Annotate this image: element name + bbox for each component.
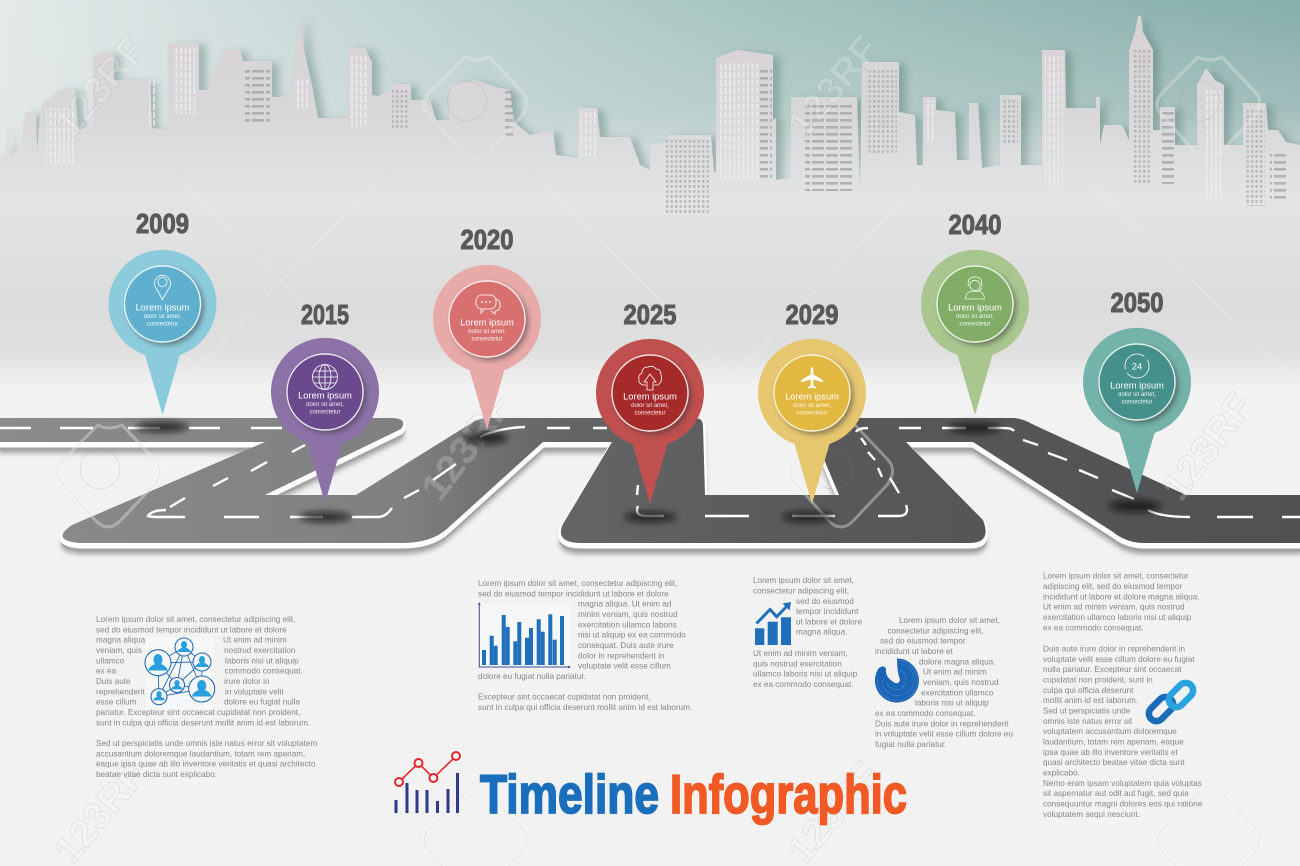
text block 5: voluptate velit esse cillum dolore eu fugiat	[1043, 655, 1195, 664]
text block 5: Nemo enim ipsam voluptatem quia voluptas	[1043, 779, 1202, 788]
pin 2050: consectetur	[1121, 400, 1153, 406]
text block 3: quis nostrud exercitation	[753, 659, 842, 668]
text block 1: accusantium doloremque laudantium, totam rem aperiam,	[96, 749, 305, 758]
text block 2: magna aliqua. Ut enim ad	[578, 600, 672, 609]
text block 2: sunt in culpa qui officia deserunt mollit anim id est laborum.	[478, 703, 692, 712]
road centre dashes	[0, 427, 1300, 517]
text block 2: voluptate velit esse cillum	[578, 662, 671, 671]
text block 3: tempor incididunt	[796, 607, 859, 616]
icon: chain link	[1146, 680, 1196, 724]
text block 2: sed do eiusmod tempor incididunt ut labore et dolore	[478, 589, 669, 598]
text block 1: eaque ipsa quae ab illo inventore veritatis et quasi architecto	[96, 760, 316, 769]
icon: concentric pie	[875, 658, 919, 702]
text block 1: Duis aute	[96, 677, 131, 686]
pin 2009: Lorem ipsum	[136, 302, 190, 312]
pin 2029: 2029	[786, 299, 838, 330]
text block 4: Lorem ipsum dolor sit amet,	[899, 616, 1000, 625]
pin 2020: 2020	[460, 224, 514, 255]
pin 2015: 2015	[301, 299, 349, 330]
pin 2040	[921, 209, 1029, 415]
text block 2: dolor in reprehenderit in	[578, 651, 665, 660]
pin 2025: Lorem ipsum	[623, 392, 677, 402]
text block 5: consequuntur magni dolores eos qui ratione	[1043, 800, 1203, 808]
text block 2: Excepteur sint occaecat cupidatat non proident,	[478, 693, 651, 702]
pin 2040: Lorem ipsum	[948, 302, 1002, 312]
pin 2009	[108, 208, 216, 415]
icon: speech bubbles	[476, 295, 500, 314]
text block 4: ex ea commodo consequat.	[875, 709, 976, 718]
text block 1: sed do eiusmod tempor incididunt ut labore et dolore	[96, 625, 287, 634]
text block 1: Lorem ipsum dolor sit amet, consectetur adipiscing elit,	[96, 615, 295, 624]
text block 5: voluptatem accusantium doloremque	[1043, 727, 1177, 736]
text block 4: consectetur adipiscing elit,	[888, 626, 984, 635]
text block 1: irure dolor in	[224, 677, 270, 686]
pin 2020: Lorem ipsum	[460, 318, 514, 328]
pin 2029: dolor sit amet,	[793, 403, 831, 409]
text block 1: veniam, quis	[96, 646, 142, 655]
pin 2015: dolor sit amet,	[306, 402, 344, 408]
text block 3: Lorem ipsum dolor sit amet,	[753, 576, 854, 585]
icon: 24 hours	[1125, 354, 1149, 378]
text block 3: ex ea commodo consequat.	[753, 680, 854, 689]
pin 2025	[596, 299, 704, 504]
text block 3: magna aliqua.	[796, 628, 847, 637]
title: Timeline	[480, 763, 659, 825]
text block 3: sed do eiusmod	[796, 597, 854, 606]
watermarks: 123RF	[780, 28, 888, 146]
text block 2	[478, 579, 692, 712]
icon: people network	[145, 637, 215, 709]
text block 5: laudantium, totam rem aperiam, eaque	[1043, 738, 1184, 746]
watermarks: 123RF	[1155, 386, 1262, 508]
text block 1: laboris nisi ut aliquip	[225, 656, 299, 665]
text block 1: in voluptate velit	[225, 687, 284, 696]
text block 5: omnis iste natus error sit	[1043, 717, 1133, 726]
icon: cloud upload	[639, 366, 662, 390]
pin 2040: 2040	[948, 209, 1002, 240]
pin 2050: dolor sit amet,	[1118, 392, 1156, 398]
text block 4: fugiat nulla pariatur.	[875, 740, 946, 749]
text block 5: ipsa quae ab illo inventore veritatis et	[1043, 748, 1178, 757]
pin 2050: 2050	[1110, 287, 1164, 318]
pin 2025: consectetur	[634, 410, 666, 416]
pin 2015: Lorem ipsum	[298, 390, 352, 400]
text block 4: exercitation ullamco	[921, 688, 994, 697]
text block 3	[753, 576, 862, 689]
text block 4: laboris nisi ut aliquip	[915, 699, 989, 708]
text block 1: pariatur. Excepteur sint occaecat cupidatat non proident,	[96, 708, 300, 717]
text block 5: culpa qui officia deserunt	[1043, 686, 1134, 695]
text block 1: beatae vitae dicta sunt explicabo.	[96, 770, 217, 779]
text block 3: Ut enim ad minim veniam,	[753, 649, 848, 658]
text block 5: cupidatat non proident, sunt in	[1043, 676, 1153, 684]
text block 5: ex ea commodo consequat.	[1043, 623, 1144, 632]
pin 2015	[271, 299, 379, 503]
pin 2009: dolor sit amet,	[144, 314, 182, 320]
text block 5: adipiscing elit, sed do eiusmod tempor	[1043, 582, 1183, 591]
pin 2029	[758, 299, 866, 504]
pin 2025: 2025	[624, 299, 676, 330]
text block 1: ullamco	[96, 656, 125, 665]
pin 2050: Lorem ipsum	[1110, 380, 1164, 390]
text block 5: nulla pariatur. Excepteur sint occaecat	[1043, 665, 1182, 674]
pin 2029: consectetur	[796, 410, 828, 416]
text block 4: Duis aute irure dolor in reprehenderit	[875, 719, 1009, 728]
pin 2020: consectetur	[471, 336, 503, 342]
text block 1: dolore eu fugiat nulla	[224, 698, 300, 707]
text block 1: nostrud exercitation	[224, 646, 296, 655]
icon: headset operator	[966, 277, 984, 299]
text block 4: Ut enim ad minim	[923, 668, 987, 677]
text block 5: voluptatem sequi nesciunt.	[1043, 810, 1140, 819]
text block 5: Duis aute irure dolor in reprehenderit in	[1043, 644, 1185, 654]
pin 2009: consectetur	[147, 322, 178, 328]
text block 5: Lorem ipsum dolor sit amet, consectetur	[1043, 572, 1189, 581]
text block 5: exercitation ullamco laboris nisi ut aliquip	[1043, 613, 1192, 622]
text block 5	[1043, 572, 1203, 819]
text block 5: explicabo.	[1043, 768, 1080, 778]
text block 3: ut labore et dolore	[796, 618, 862, 626]
text block 4: dolore magna aliqua.	[919, 657, 995, 666]
text block 1: esse cillum	[96, 698, 137, 707]
text block 4: in voluptate velit esse cillum dolore eu	[875, 730, 1013, 739]
text block 2: dolore eu fugiat nulla pariatur.	[478, 672, 586, 681]
text block 1: magna aliqua.	[96, 636, 147, 645]
text block 3: consectetur adipiscing elit,	[753, 586, 849, 596]
icon: airplane	[801, 367, 823, 389]
watermarks: 123RF	[414, 386, 521, 508]
title	[480, 763, 907, 825]
text block 3: ullamco laboris nisi ut aliquip	[753, 670, 858, 679]
text block 5: Sed ut perspiciatis unde	[1043, 706, 1131, 716]
text block 2: exercitation ullamco laboris	[578, 620, 677, 629]
text block 2: nisi ut aliquip ex ea commodo	[578, 631, 686, 640]
text block 1: sunt in culpa qui officia deserunt mollit anim id est laborum.	[96, 718, 310, 727]
pin 2029: Lorem ipsum	[785, 392, 839, 402]
text block 1: reprehenderit	[96, 687, 145, 696]
text block 4	[875, 616, 1013, 749]
text block 5: sit aspernatur aut odit aut fugit, sed quia	[1043, 789, 1189, 798]
pin shadows on road	[136, 422, 1161, 522]
text block 2: consequat. Duis aute irure	[578, 641, 674, 650]
text block 2: Lorem ipsum dolor sit amet, consectetur adipiscing elit,	[478, 579, 677, 588]
icon: 24 hours: 24	[1132, 362, 1142, 372]
pin 2040: dolor sit amet,	[956, 314, 994, 320]
pin 2020	[433, 224, 541, 430]
icon: location	[154, 275, 170, 300]
city skyline	[0, 15, 1300, 230]
text block 4: sed do eiusmod tempor	[880, 637, 966, 646]
icon: globe	[312, 364, 338, 390]
pin 2025: dolor sit amet,	[631, 403, 669, 409]
text block 1: ex ea	[96, 667, 116, 676]
text block 5: Ut enim ad minim veniam, quis nostrud	[1043, 603, 1185, 612]
pin 2015: consectetur	[309, 410, 341, 416]
text block 1: commodo consequat.	[224, 667, 303, 676]
title: Infographic	[670, 763, 907, 825]
icon: growth chart	[755, 602, 791, 645]
text block 5: quasi architecto beatae vitae dicta sunt	[1043, 758, 1185, 767]
pin 2009: 2009	[136, 208, 189, 239]
text block 1: Sed ut perspiciatis unde omnis iste natus error sit voluptatem	[96, 739, 317, 748]
pin 2040: consectetur	[959, 322, 991, 328]
road	[0, 418, 1300, 550]
text block 5: mollit anim id est laborum.	[1043, 696, 1138, 705]
text block 4: veniam, quis nostrud	[923, 678, 999, 687]
text block 5: incididunt ut labore et dolore magna aliqua.	[1043, 592, 1200, 601]
text block 4: incididunt ut labore et	[875, 647, 954, 656]
text block 1	[96, 615, 317, 779]
text block 2: minim veniam, quis nostrud	[578, 610, 678, 619]
bar chart	[478, 602, 571, 668]
text block 1: Ut enim ad minim	[223, 636, 287, 645]
pin 2050	[1083, 287, 1191, 493]
icon: title chart	[394, 752, 460, 813]
pin 2020: dolor sit amet,	[468, 329, 506, 335]
watermarks: 123RF	[47, 28, 155, 146]
